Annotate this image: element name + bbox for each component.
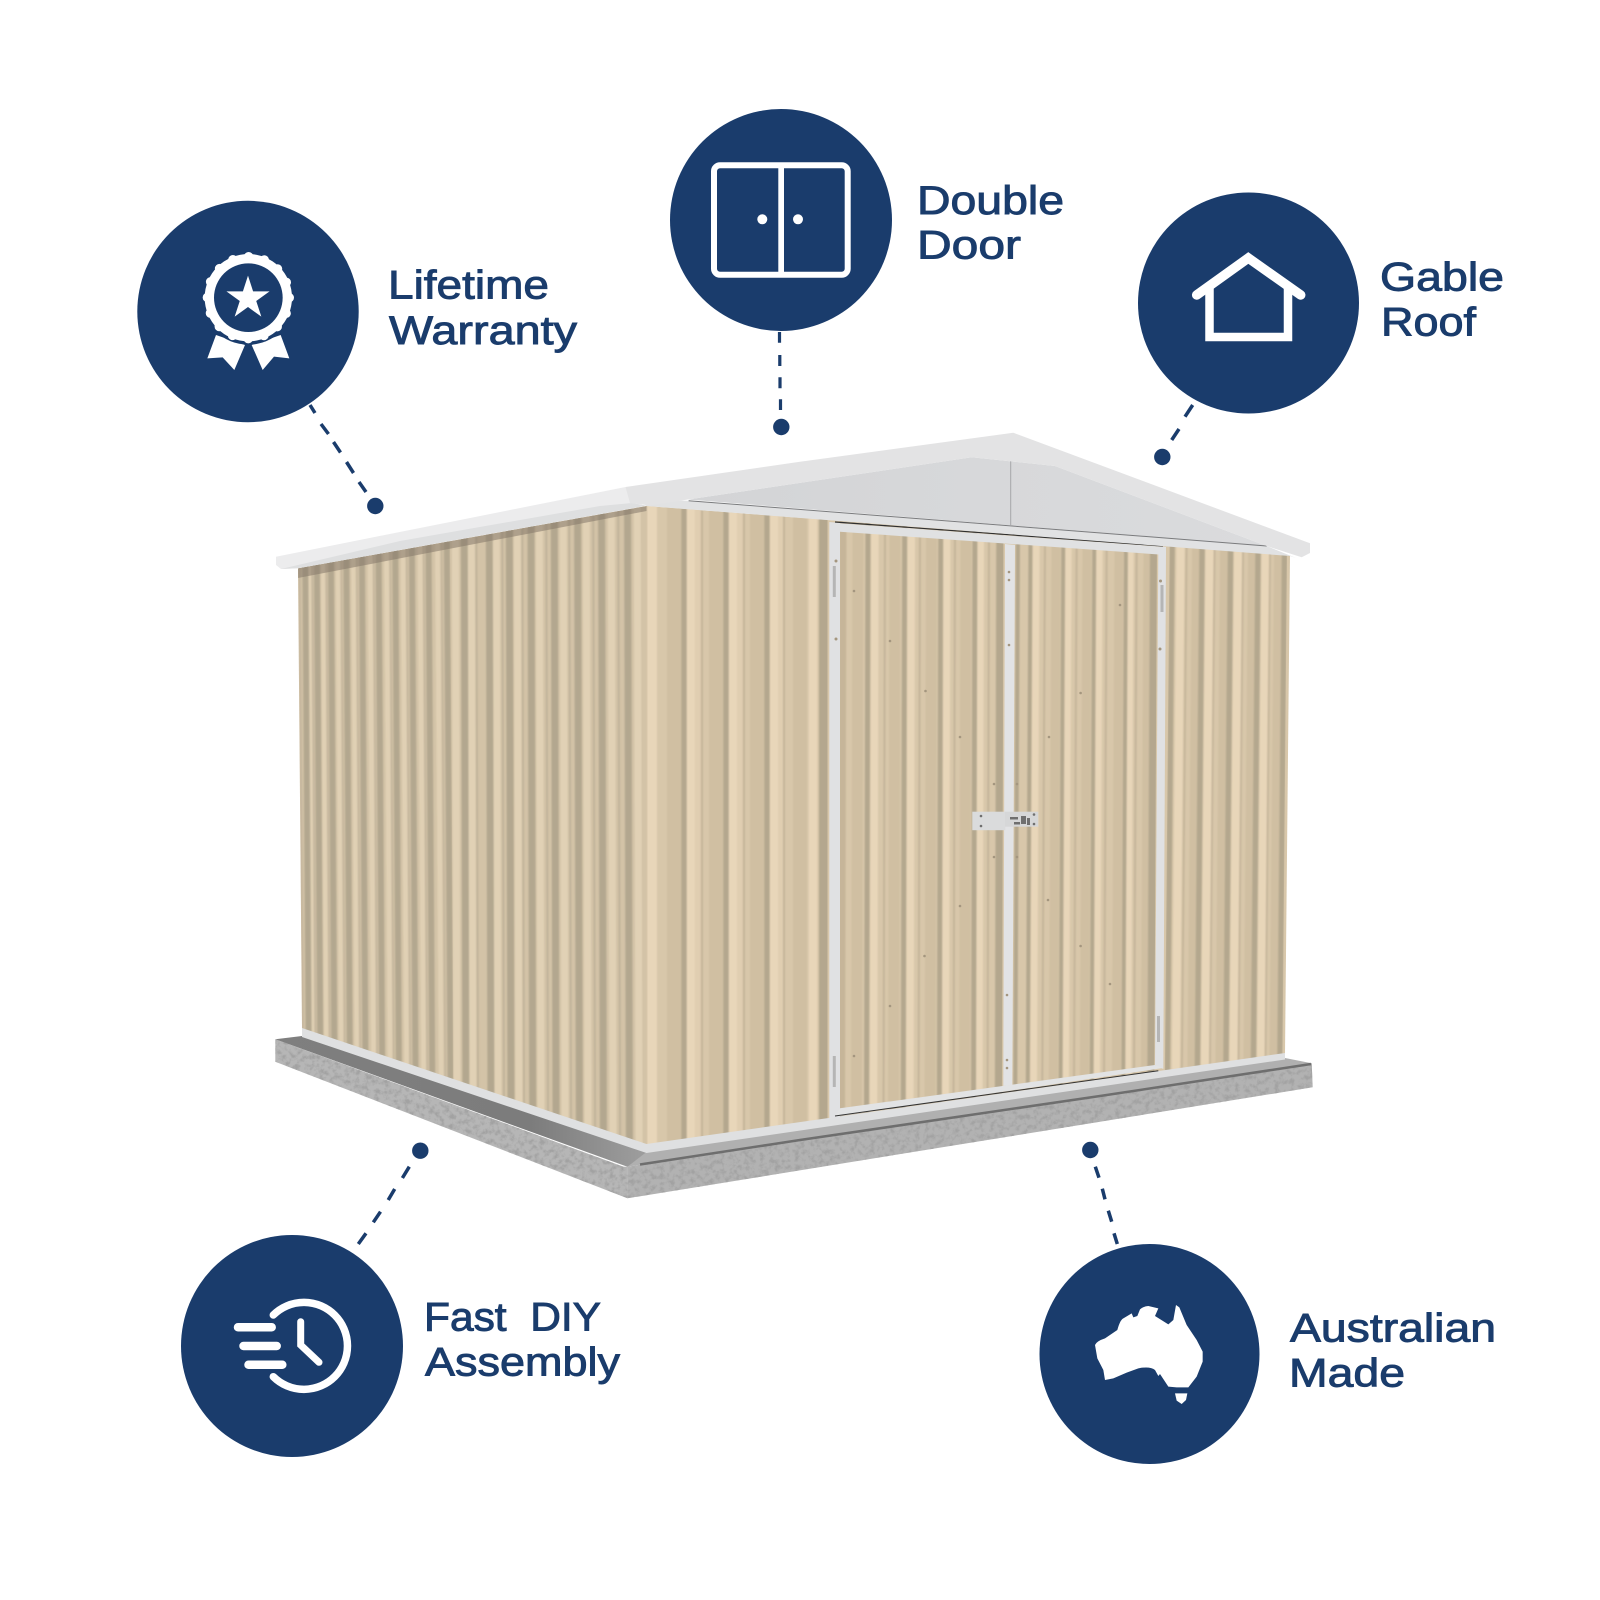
concrete slab [275,1036,1313,1198]
callout: gable roof [1138,192,1504,465]
label: australian made [1289,1307,1496,1396]
label: australian made: Australian [1290,1307,1496,1351]
icon circle: double door [670,109,892,331]
label: double door: Double [917,179,1064,223]
door fasteners [834,560,1162,1069]
icon circle: warranty ribbon [137,201,359,422]
label: gable roof: Roof [1381,301,1477,345]
label: lifetime warranty [388,263,577,353]
label: lifetime warranty: Lifetime [388,263,549,307]
white base flashing [302,1028,1285,1153]
label: lifetime warranty: Warranty [389,309,577,353]
roof [276,433,1310,569]
icon circle: australia map [1040,1244,1260,1464]
connector: lifetime warranty [310,405,383,514]
callout: australian made [1040,1142,1496,1464]
shed illustration [275,433,1313,1198]
callout: lifetime warranty [137,201,577,514]
label: fast DIY assembly [424,1296,620,1385]
label: australian made: Made [1289,1352,1405,1396]
front wall corrugated cladding [644,490,1294,1170]
label: fast DIY assembly: Assembly [425,1341,620,1385]
label: gable roof: Gable [1380,256,1504,300]
connector: gable roof [1154,405,1193,465]
label: double door [917,179,1064,267]
double door frame [829,522,1166,1119]
door latch [972,812,1038,830]
left side wall [296,480,648,1180]
gable panel [640,457,1296,558]
icon circle: gable house [1138,192,1359,414]
callout: fast DIY assembly [181,1142,620,1457]
door hinges [833,566,1164,1087]
connector: double door [773,332,790,435]
label: fast DIY assembly: Fast DIY [424,1296,601,1340]
icon circle: fast clock [181,1235,403,1457]
label: gable roof [1380,256,1504,345]
label: double door: Door [917,223,1021,267]
callout: double door [670,109,1064,435]
infographic canvas [137,109,1502,1464]
connector: fast DIY assembly [358,1142,428,1244]
connector: australian made [1082,1142,1117,1244]
